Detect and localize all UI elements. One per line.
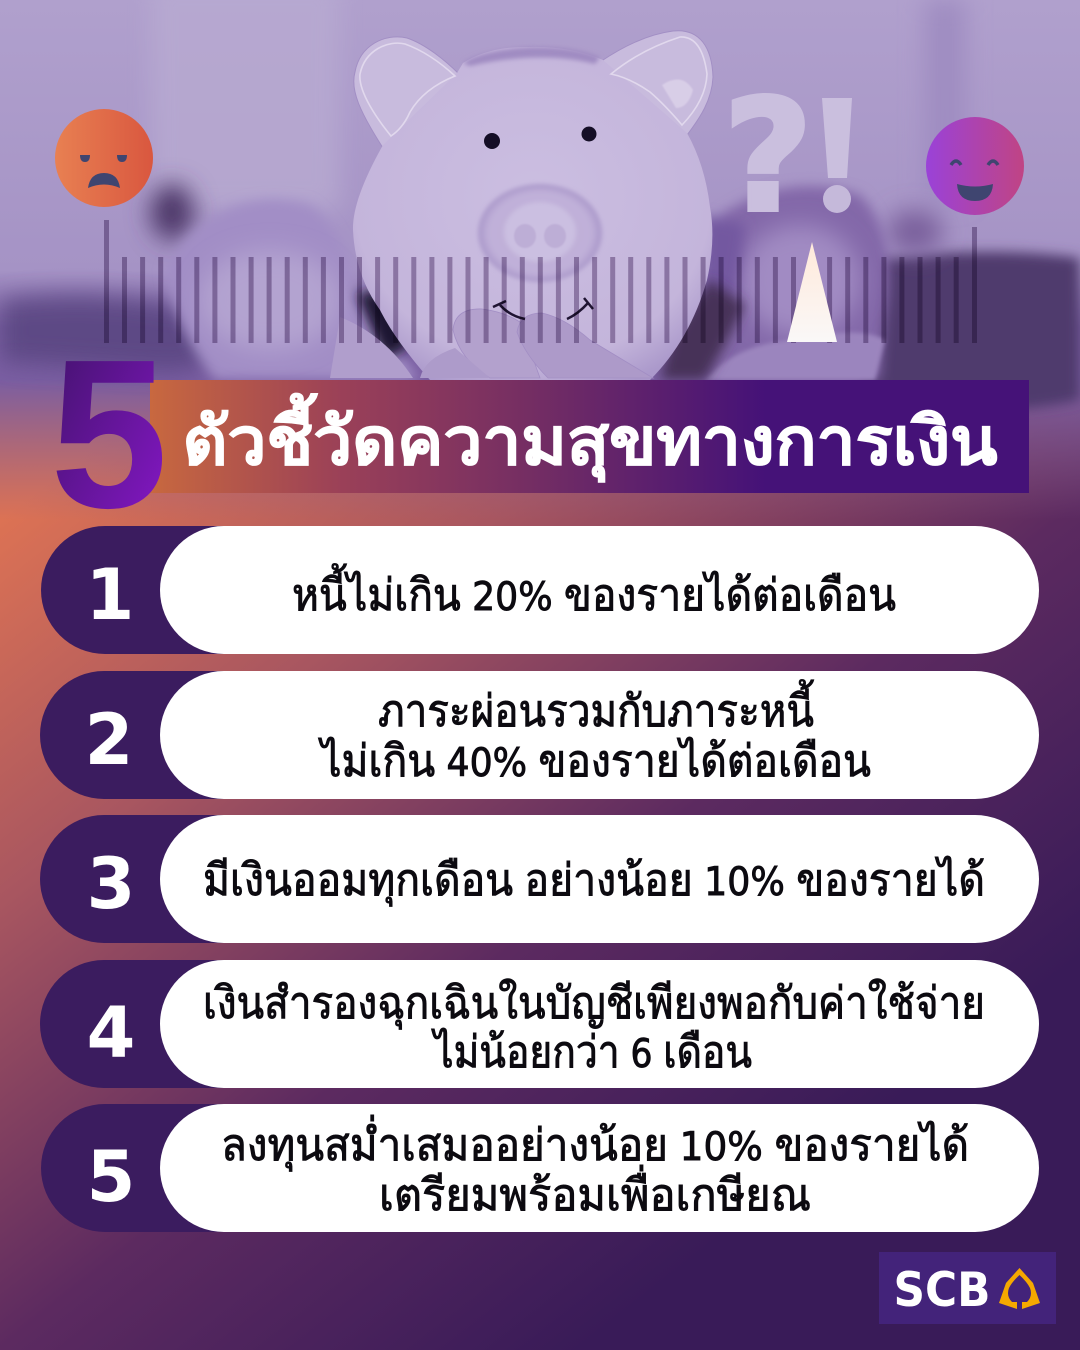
ear highlights bbox=[360, 37, 707, 136]
row 5 bbox=[41, 1104, 1039, 1232]
gauge pointer bbox=[787, 242, 837, 342]
photo: piggy bank held in hands bbox=[0, 0, 1080, 520]
pig body bbox=[353, 47, 712, 380]
row 2 bbox=[40, 671, 1039, 799]
row 4 bbox=[40, 960, 1039, 1088]
row 2: ภาระผ่อนรวมกับภาระหนี้ bbox=[378, 679, 814, 736]
left ear bbox=[354, 37, 460, 150]
question and exclamation marks bbox=[723, 66, 852, 247]
row 4: 4 bbox=[87, 992, 135, 1074]
SCB logo: SCB bbox=[894, 1263, 990, 1318]
row 1: หนี้ไม่เกิน 20% ของรายได้ต่อเดือน bbox=[292, 563, 896, 620]
row 4: เงินสำรองฉุกเฉินในบัญชีเพียงพอกับค่าใช้จ่าย bbox=[203, 978, 985, 1030]
icon: happy face bbox=[926, 117, 1024, 215]
right ear bbox=[600, 31, 713, 135]
row 5: เตรียมพร้อมเพื่อเกษียณ bbox=[379, 1164, 811, 1220]
row 5: 5 bbox=[87, 1136, 135, 1218]
row 2: ไม่เกิน 40% ของรายได้ต่อเดือน bbox=[318, 736, 871, 786]
question and exclamation marks: ? bbox=[723, 66, 813, 247]
row 3: มีเงินออมทุกเดือน อย่างน้อย 10% ของรายได้ bbox=[203, 855, 985, 907]
big numeral 5: 5 bbox=[50, 315, 168, 552]
gauge scale bars bbox=[106, 220, 974, 343]
row 1 bbox=[41, 526, 1039, 654]
row 2: 2 bbox=[85, 699, 133, 781]
title text: ตัวชี้วัดความสุขทางการเงิน bbox=[182, 392, 998, 483]
fingers bbox=[453, 309, 540, 378]
row 1: 1 bbox=[86, 554, 134, 636]
eyes bbox=[484, 133, 500, 149]
SCB logo bbox=[879, 1252, 1056, 1324]
row 5: ลงทุนสม่ำเสมออย่างน้อย 10% ของรายได้ bbox=[221, 1114, 969, 1172]
icon: sad face bbox=[55, 109, 153, 207]
row 3 bbox=[40, 815, 1039, 943]
coin slot ridge bbox=[463, 47, 600, 66]
row 4: ไม่น้อยกว่า 6 เดือน bbox=[431, 1027, 752, 1077]
row 3: 3 bbox=[87, 843, 135, 925]
smile bbox=[493, 298, 593, 319]
icon: SCB bai sema bbox=[999, 1268, 1040, 1309]
snout bbox=[478, 184, 602, 282]
title ribbon bbox=[50, 315, 1029, 552]
